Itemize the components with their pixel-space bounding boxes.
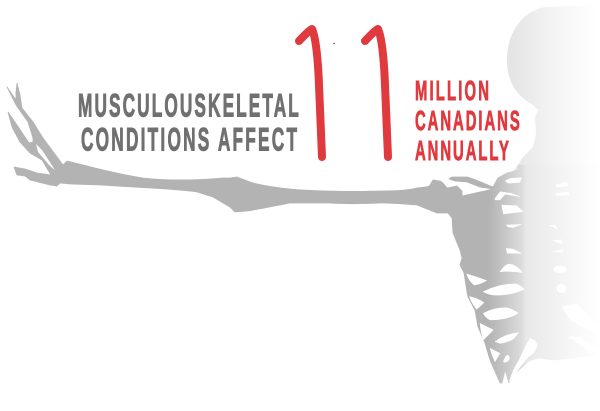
second digit 1 (365, 29, 388, 157)
rib gaps upper set (495, 178, 523, 253)
big number 11 (299, 29, 388, 157)
finger gap (36, 144, 55, 170)
rib gap lower set (500, 264, 523, 273)
line: CONDITIONS AFFECT: CONDITIONS AFFECT (81, 123, 297, 158)
arm, shoulder and torso silhouette (7, 83, 600, 383)
heading: musculoskeletal conditions affect (78, 89, 299, 158)
rib gaps (467, 264, 537, 382)
first digit 1 (299, 29, 322, 157)
spine side gaps (555, 182, 568, 187)
line: MUSCULOUSKELETAL: MUSCULOUSKELETAL (78, 89, 299, 124)
small speck (333, 43, 335, 44)
upper left rib gaps (505, 178, 522, 183)
skull (507, 5, 600, 180)
line: CANADIANS: CANADIANS (415, 105, 520, 136)
line: MILLION: MILLION (415, 75, 489, 106)
red text: million Canadians annually (415, 75, 520, 166)
faint right rib gaps (548, 182, 600, 352)
line: ANNUALLY: ANNUALLY (415, 135, 509, 166)
